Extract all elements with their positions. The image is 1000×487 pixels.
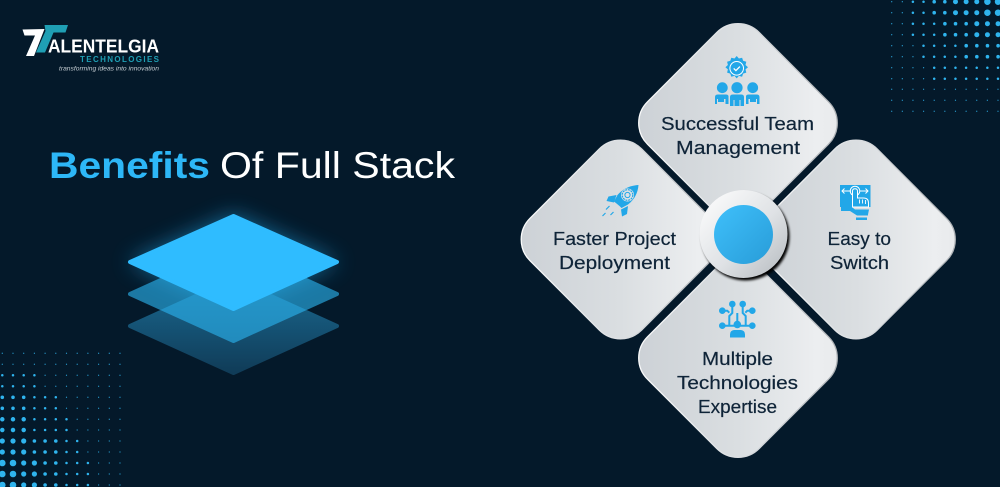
logo tagline: transforming ideas into innovation — [59, 66, 159, 72]
card label line 2: Management — [676, 138, 800, 158]
hub blue disc — [714, 205, 773, 264]
logo mark — [22, 25, 68, 56]
hub shadow — [702, 192, 790, 280]
card label: Multiple — [702, 349, 773, 369]
card label: Faster Project — [553, 229, 676, 249]
card label line 2: Switch — [830, 253, 889, 273]
logo wordmark: ALENTELGIA — [48, 36, 159, 56]
panel: Multiple Technologies Expertise — [626, 246, 850, 470]
middle layer — [130, 247, 337, 341]
title remainder: Of Full Stack — [220, 145, 456, 186]
icon: technology network — [719, 301, 756, 338]
card label: Easy to — [828, 229, 891, 249]
panel: Faster Project Deployment — [509, 128, 732, 351]
card label line 2: Technologies — [677, 373, 798, 393]
card shape — [744, 128, 968, 351]
illustration: glowing stacked layers — [128, 214, 339, 373]
card label line 2: Deployment — [559, 253, 670, 273]
top layer — [130, 216, 337, 309]
logo: Talentelgia Technologies — [22, 25, 160, 72]
icon: rocket with gear — [602, 185, 638, 216]
card label line 3: Expertise — [698, 397, 777, 417]
bottom layer — [130, 279, 337, 373]
card shape — [626, 246, 850, 470]
card label: Successful Team — [661, 114, 814, 134]
panel: Easy to Switch — [744, 128, 968, 351]
layer glow — [128, 214, 339, 311]
center hub — [700, 190, 790, 280]
card shape — [626, 11, 850, 235]
title highlighted word: Benefits — [49, 145, 210, 186]
icon: touch swipe — [840, 185, 870, 220]
decorative dot grid: bottom left — [2, 353, 120, 485]
title — [49, 145, 456, 186]
card shape — [509, 128, 732, 351]
logo subtitle: TECHNOLOGIES — [80, 55, 160, 64]
decorative dot grid: top right — [892, 2, 998, 111]
icon: team with gear — [715, 56, 760, 106]
hub outer ring — [700, 190, 788, 278]
panel: Successful Team Management — [626, 11, 850, 235]
